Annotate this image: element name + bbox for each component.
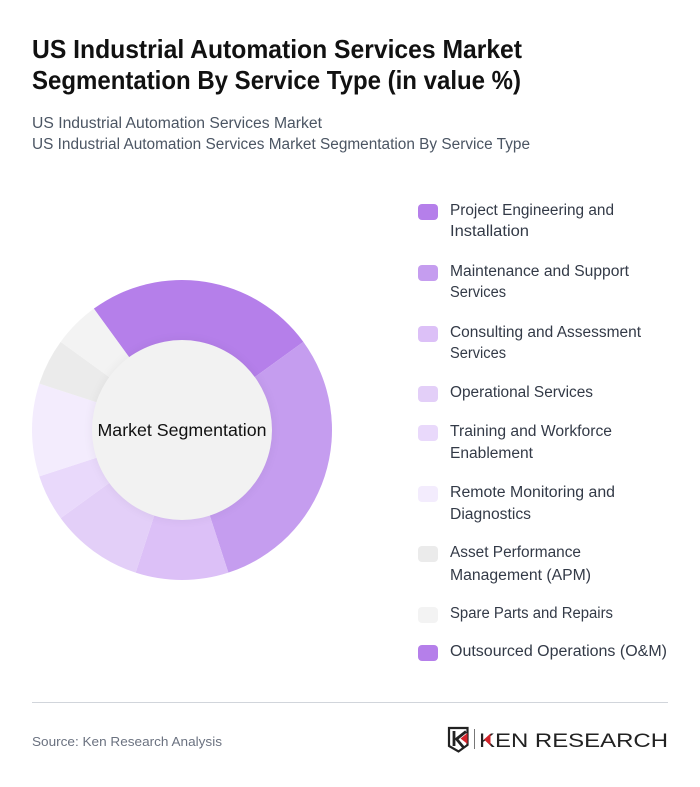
legend item: Training and Workforce Enablement [418, 423, 612, 462]
segment: Asset Performance Management [39, 342, 182, 430]
legend item: Project Engineering and Installation: Installation [450, 223, 529, 240]
segment: Training and Workforce Enablement [39, 430, 182, 518]
title: US Industrial Automation Services Market [32, 34, 522, 64]
title [32, 34, 522, 95]
subtitle: US Industrial Automation Services Market [32, 115, 323, 132]
legend item: Training and Workforce Enablement: Enablement [450, 445, 534, 462]
legend item: Consulting and Assessment Services [418, 324, 642, 362]
legend item: Maintenance and Support Services: Services [450, 284, 506, 301]
legend item: Project Engineering and Installation [418, 202, 614, 240]
legend item: Project Engineering and Installation: Project Engineering and [450, 202, 614, 219]
subtitle [32, 115, 530, 153]
legend item: Spare Parts and Repairs: Spare Parts and Repairs [450, 605, 613, 622]
legend item: Asset Performance Management (APM) [418, 544, 591, 584]
donut centre label: Market Segmentation [98, 420, 266, 440]
legend item: Asset Performance Management (APM): Management (APM) [450, 567, 591, 584]
segment: Maintenance and Support Services [182, 342, 332, 573]
legend item: Maintenance and Support Services [418, 263, 630, 301]
wordmark: KEN RESEARCH [479, 731, 668, 752]
logo: Ken Research [449, 728, 668, 752]
segment: Project Engineering and Installation [94, 280, 303, 430]
source note: Source: Ken Research Analysis [32, 734, 223, 749]
subtitle: US Industrial Automation Services Market Segmentation By Service Type [32, 136, 530, 153]
legend item: Asset Performance Management (APM): Asset Performance [450, 544, 581, 561]
segment: Remote Monitoring and Diagnostics [32, 384, 182, 476]
legend item: Outsourced Operations (O&M): Outsourced Operations (O&M) [450, 643, 667, 660]
legend [418, 202, 667, 661]
donut chart: market segmentation [32, 280, 332, 580]
legend item: Training and Workforce Enablement: Training and Workforce [450, 423, 612, 440]
icon: Ken Research shield [449, 728, 468, 752]
legend item: Remote Monitoring and Diagnostics [418, 484, 615, 523]
legend item: Remote Monitoring and Diagnostics: Remote Monitoring and [450, 484, 615, 501]
legend item: Operational Services: Operational Services [450, 384, 593, 401]
legend item: Consulting and Assessment Services: Services [450, 345, 506, 362]
segment: Consulting and Assessment Services [136, 430, 228, 580]
legend item: Remote Monitoring and Diagnostics: Diagnostics [450, 506, 531, 523]
legend item: Consulting and Assessment Services: Consulting and Assessment [450, 324, 642, 341]
title: Segmentation By Service Type (in value %) [32, 65, 521, 95]
segment: Spare Parts and Repairs [61, 309, 182, 430]
segment: Operational Services [61, 430, 182, 573]
legend item: Maintenance and Support Services: Maintenance and Support [450, 263, 630, 280]
donut centre label [92, 340, 272, 520]
